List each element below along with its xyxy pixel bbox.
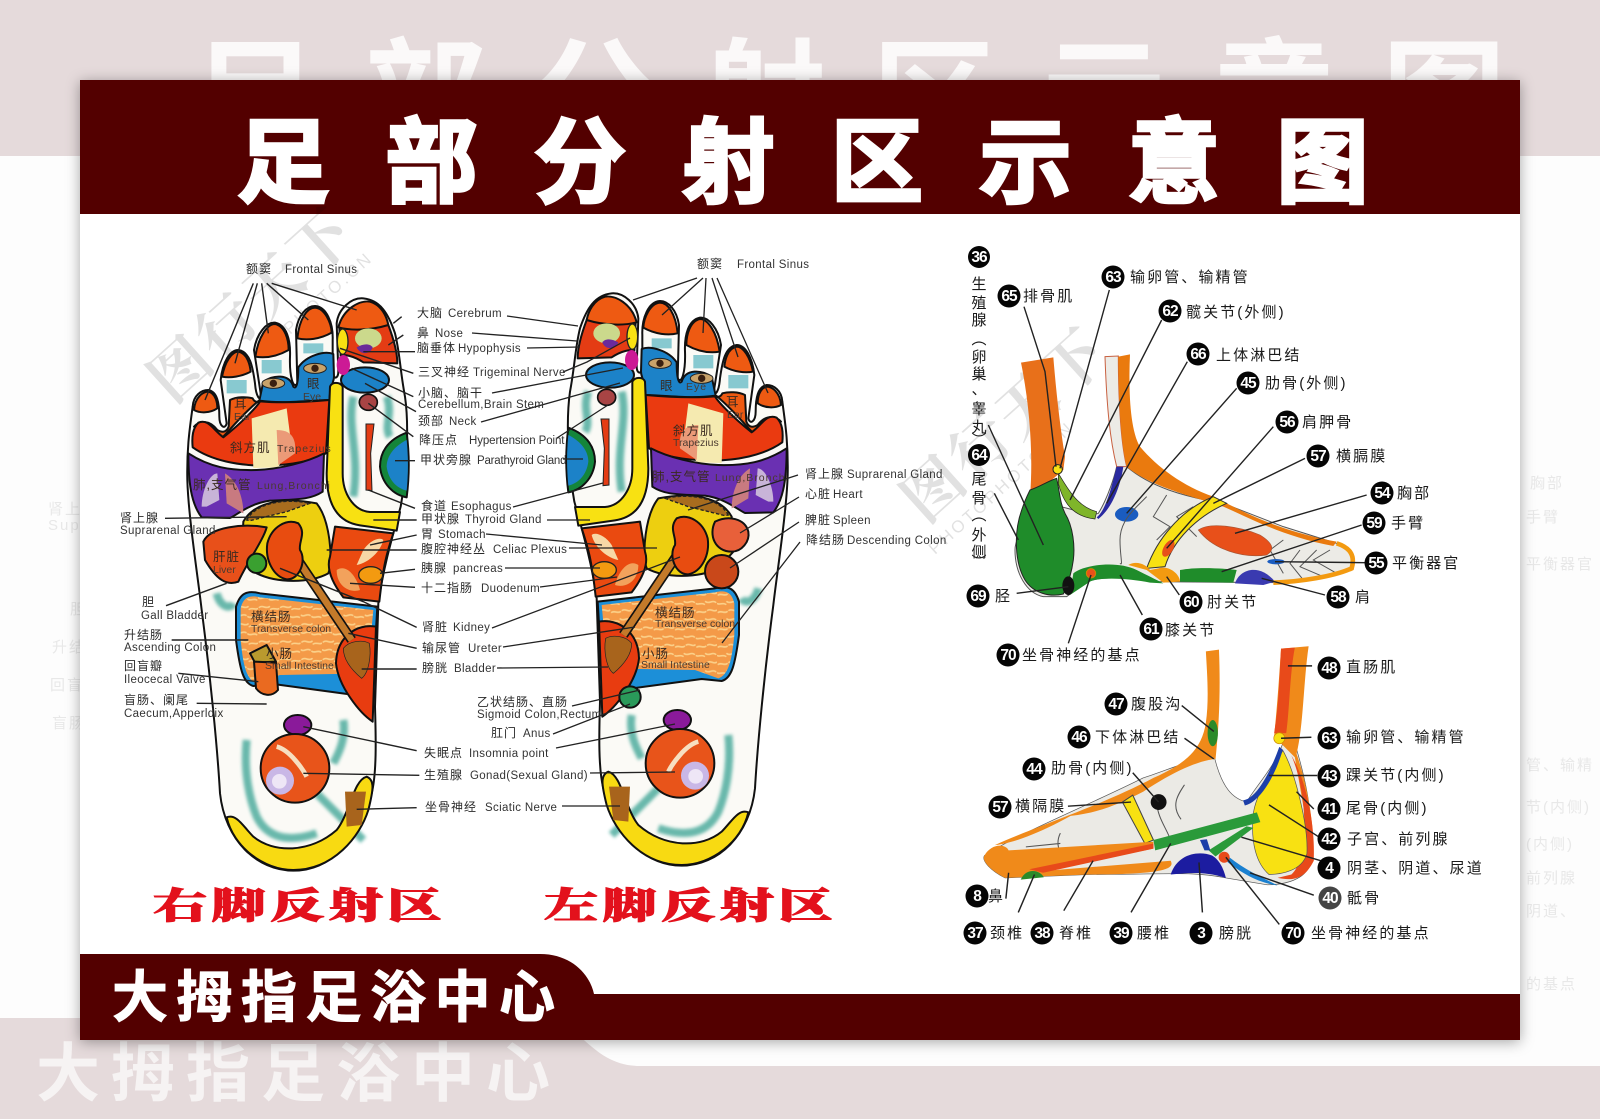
badge numbers: 63	[1321, 730, 1338, 747]
vertical label: coccyx: 侧	[971, 544, 987, 561]
anatomy labels: right foot left column	[120, 511, 224, 720]
badge numbers: 42	[1321, 831, 1337, 848]
anatomy labels: central column: 食道	[421, 499, 447, 513]
side foot labels: 肩	[1355, 589, 1372, 606]
vertical label: coccyx: 尾	[971, 471, 987, 488]
right foot region names: Transverse colon	[251, 623, 331, 635]
anatomy labels: central column: Cerebellum,Brain Stem	[418, 399, 544, 411]
side foot labels: 腹股沟	[1131, 696, 1182, 713]
side foot labels: 膝关节	[1165, 622, 1216, 639]
side foot labels: 膀胱	[1219, 925, 1253, 942]
anatomy labels: central column: Thyroid Gland	[465, 514, 542, 526]
badge numbers: 38	[1034, 925, 1051, 942]
side foot labels: 肘关节	[1207, 594, 1258, 611]
anatomy labels: left foot right column: 脾脏	[805, 513, 831, 527]
ghost side labels: 肾上腺	[48, 501, 99, 518]
watermark: PHOTOPHOTO.CN	[925, 418, 1078, 558]
vertical label: gonad: 殖	[971, 295, 987, 312]
anatomy labels: central column: Cerebrum	[448, 308, 502, 320]
side foot labels: 颈椎	[990, 925, 1024, 942]
side foot labels: 骶骨	[1347, 890, 1381, 907]
numbered badges	[964, 246, 1394, 944]
badge numbers: 4	[1325, 860, 1334, 877]
right foot region names: 小肠	[266, 647, 293, 661]
poster panel	[80, 80, 1520, 1040]
side foot labels: 胫	[995, 588, 1012, 605]
right foot region names: 眼	[307, 377, 321, 391]
badge numbers: 62	[1162, 303, 1178, 320]
right foot: ileocecal valve	[250, 645, 276, 663]
badge numbers	[967, 249, 1391, 942]
side foot labels: 尾骨(内侧)	[1346, 800, 1429, 817]
badge numbers: 56	[1279, 414, 1296, 431]
caption: left foot: 左脚反射区	[544, 878, 837, 929]
left foot map	[472, 278, 800, 866]
badge numbers: 44	[1026, 761, 1043, 778]
badge numbers: 47	[1108, 696, 1124, 713]
anatomy labels: central column: Sciatic Nerve	[485, 802, 557, 814]
badge numbers: 70	[1000, 647, 1016, 664]
anatomy labels: central column: 大脑	[417, 306, 443, 320]
anatomy labels: left foot right column: 降结肠	[806, 533, 845, 547]
anatomy labels: central column: 甲状腺	[421, 512, 460, 526]
anatomy labels: left foot right column: 心脏	[805, 487, 831, 501]
anatomy labels: central column: pancreas	[453, 563, 503, 575]
anatomy labels: central column: 降压点	[419, 433, 458, 447]
badge numbers: 48	[1321, 660, 1338, 677]
left foot region names: Eye	[686, 381, 707, 393]
ghost side labels: 平衡器官	[1526, 556, 1594, 573]
anatomy labels: central column: 颈部	[418, 414, 444, 428]
anatomy labels: central column: 膀胱	[422, 661, 448, 675]
badge numbers: 60	[1183, 594, 1199, 611]
left foot region names: 横结肠	[655, 606, 696, 620]
right foot: liver	[203, 526, 267, 583]
anatomy labels: central column: 输尿管	[422, 641, 461, 655]
footer name: 大拇指足浴中心	[112, 953, 564, 1034]
right foot region names: 肺,支气管	[193, 478, 251, 492]
side foot labels: 腰椎	[1137, 925, 1171, 942]
side foot labels: 横隔膜	[1015, 798, 1066, 815]
badge numbers: 58	[1330, 589, 1347, 606]
left foot region names: 眼	[660, 379, 674, 393]
ghost side labels: 管、输精	[1526, 757, 1594, 774]
vertical label: coccyx: 骨	[971, 490, 987, 507]
left foot region names: Trapezius	[673, 437, 719, 449]
badge numbers: 46	[1071, 729, 1088, 746]
left foot: spleen	[705, 555, 738, 588]
right foot region names: Ear	[234, 411, 251, 423]
vertical label: gonad: 生	[971, 276, 987, 293]
badge numbers: 57	[992, 799, 1008, 816]
right foot region names	[193, 377, 334, 672]
side foot labels: 髋关节(外侧)	[1186, 304, 1286, 321]
anatomy labels: right foot left column: 回盲瓣	[124, 658, 163, 673]
ghost title: 足部分射区示意图	[192, 0, 1552, 178]
anatomy labels: right foot left column: Caecum,Apperldix	[124, 708, 224, 720]
side foot labels: 上体淋巴结	[1216, 347, 1302, 364]
left foot: anus area	[619, 686, 641, 708]
side foot labels: 肩胛骨	[1302, 414, 1353, 431]
ghost footer name: 大拇指足浴中心	[36, 1023, 561, 1115]
watermark	[126, 186, 1124, 558]
anatomy labels: central column: 肾脏	[422, 620, 448, 634]
badge numbers: 55	[1368, 555, 1385, 572]
side foot labels: 下体淋巴结	[1095, 729, 1181, 746]
anatomy labels: central column: Hypertension Point	[469, 435, 565, 447]
anatomy labels: right foot left column: Ascending Colon	[124, 642, 216, 654]
anatomy labels: right foot left column: Suprarenal Gland	[120, 525, 216, 537]
badge numbers: 3	[1197, 925, 1206, 942]
vertical label: gonad: 、	[971, 381, 987, 398]
anatomy labels: central column: Parathyroid Gland	[477, 455, 566, 467]
badge numbers: 37	[967, 925, 983, 942]
left foot region names: Transverse colon	[655, 618, 735, 630]
anatomy labels: central column: Bladder	[454, 663, 496, 675]
badge numbers: 64	[971, 447, 988, 464]
badge numbers: 70	[1285, 925, 1301, 942]
ghost side labels: 回盲	[50, 677, 84, 694]
side foot labels: 直肠肌	[1346, 659, 1397, 676]
right foot region names: Eye	[303, 391, 321, 403]
anatomy labels: left foot right column: 肾上腺	[805, 467, 844, 481]
badge numbers: 63	[1105, 269, 1122, 286]
vertical label: gonad: 丸	[971, 419, 987, 436]
anatomy labels: right foot left column: Ileocecal Valve	[124, 674, 206, 686]
vertical label: gonad: ︶	[971, 432, 987, 449]
vertical label: gonad: 巢	[971, 366, 987, 383]
anatomy labels: central column: Trigeminal Nerve	[473, 367, 566, 379]
right foot region names: Liver	[213, 564, 236, 576]
side foot labels: 横膈膜	[1336, 448, 1387, 465]
caption: right foot: 右脚反射区	[153, 878, 446, 929]
anatomy labels: central column: Esophagus	[451, 501, 512, 513]
anatomy labels: central column: 胰腺	[421, 561, 447, 575]
ghost side labels: 前列腺	[1526, 870, 1577, 887]
watermark: PHOTO.CN	[280, 248, 377, 338]
side foot labels: 坐骨神经的基点	[1022, 647, 1142, 664]
left foot leader lines	[472, 278, 800, 806]
right foot leader lines	[165, 283, 419, 809]
side foot labels: 输卵管、输精管	[1346, 729, 1466, 746]
badge numbers: 66	[1190, 346, 1207, 363]
vertical label: gonad: 卵	[971, 349, 987, 366]
inner side foot diagram	[984, 646, 1321, 924]
vertical label: coccyx	[971, 471, 987, 571]
anatomy labels: central column: Kidney	[453, 622, 490, 634]
title: 足部分射区示意图	[237, 89, 1425, 222]
outer side foot diagram	[988, 290, 1367, 643]
ghost side labels: 节(内侧)	[1526, 799, 1591, 816]
side foot labels: 肋骨(外侧)	[1265, 375, 1348, 392]
badge numbers: 8	[973, 888, 982, 905]
anatomy labels: central column: Stomach	[438, 529, 486, 541]
anatomy labels: right foot left column: 胆	[142, 595, 155, 609]
anatomy labels: left foot right column	[697, 257, 947, 547]
anatomy labels: central column: 脑垂体	[417, 341, 456, 355]
badge numbers: 54	[1374, 485, 1391, 502]
anatomy labels: central column: 三叉神经	[418, 365, 470, 379]
anatomy labels: central column: 鼻	[417, 326, 430, 340]
left foot region names	[641, 379, 789, 671]
anatomy labels: central column: Nose	[435, 328, 463, 340]
anatomy labels: central column: 腹腔神经丛	[421, 542, 486, 556]
anatomy labels: left foot right column: Suprarenal Gland	[847, 469, 943, 481]
badge numbers: 61	[1143, 621, 1160, 638]
side foot labels: 输卵管、输精管	[1130, 269, 1250, 286]
inner foot leader lines	[1006, 666, 1321, 924]
side foot labels: 肋骨(内侧)	[1051, 760, 1134, 777]
right foot region names: 斜方肌	[230, 441, 271, 455]
watermark: 图行天下	[126, 186, 371, 418]
anatomy labels: central column: Sigmoid Colon,Rectum	[477, 709, 602, 721]
anatomy labels: left foot right column: 额窦	[697, 257, 723, 271]
side foot labels: 平衡器官	[1392, 555, 1460, 572]
anatomy labels: central column: Insomnia point	[469, 748, 549, 760]
right foot region names: 横结肠	[251, 610, 292, 624]
left foot region names: Small Intestine	[641, 659, 710, 671]
left foot region names: Lung,Bronchi	[715, 472, 789, 484]
badge numbers: 45	[1240, 375, 1257, 392]
title banner	[80, 80, 1520, 214]
anatomy labels: central column: 肛门	[491, 726, 517, 740]
anatomy labels: central column: Celiac Plexus	[493, 544, 567, 556]
badge numbers: 40	[1322, 890, 1338, 907]
anatomy labels: right foot left column: 盲肠、阑尾	[124, 692, 189, 707]
side foot labels: 鼻	[988, 888, 1005, 905]
side foot labels: 排骨肌	[1023, 288, 1074, 305]
anatomy labels: central column: 失眠点	[424, 746, 463, 760]
badge numbers: 65	[1001, 288, 1018, 305]
ghost side labels: 的基点	[1526, 976, 1577, 993]
anatomy labels: central column: 甲状旁腺	[420, 453, 472, 467]
left foot region names: Ear	[727, 409, 744, 421]
side foot labels: 脊椎	[1059, 925, 1093, 942]
anatomy labels: right foot left column: 肾上腺	[120, 511, 159, 525]
anatomy labels: left foot right column: Spleen	[833, 515, 871, 527]
side foot labels	[988, 269, 1484, 942]
right foot map	[165, 283, 419, 871]
anatomy labels: central column: Gonad(Sexual Gland)	[470, 770, 588, 782]
ghost side labels: 升结肠	[52, 639, 103, 656]
anatomy labels: central column: 额窦	[246, 262, 272, 276]
badge numbers: 39	[1113, 925, 1130, 942]
ghost side labels: 盲肠	[52, 715, 86, 732]
footer banner	[80, 954, 1520, 1040]
anatomy labels: central column: 小脑、脑干	[418, 386, 483, 400]
right foot region names: Small Intestine	[265, 660, 334, 672]
left foot: heart	[712, 518, 749, 552]
side foot labels: 子宫、前列腺	[1347, 831, 1450, 848]
anatomy labels: left foot right column: Descending Colon	[847, 535, 947, 547]
ghost side labels	[48, 475, 1594, 993]
vertical label: gonad: ︵	[971, 331, 987, 348]
left foot region names: 耳	[726, 395, 740, 409]
left foot region names: 小肠	[642, 647, 669, 661]
anatomy labels: central column: Duodenum	[481, 583, 540, 595]
vertical label: gonad	[971, 276, 987, 449]
left foot region names: 肺,支气管	[652, 470, 710, 484]
side foot labels: 阴茎、阴道、尿道	[1347, 860, 1484, 877]
anatomy labels: left foot right column: Frontal Sinus	[737, 259, 809, 271]
anatomy labels: central column: Ureter	[468, 643, 502, 655]
anatomy labels: central column: Anus	[523, 728, 551, 740]
badge numbers: 36	[971, 249, 988, 266]
vertical label: coccyx: 外	[971, 527, 987, 544]
anatomy labels: central column: 生殖腺	[424, 768, 463, 782]
ghost side labels: (内侧)	[1526, 836, 1574, 853]
anatomy labels: right foot left column: Gall Bladder	[141, 610, 208, 622]
right foot: gall bladder	[247, 554, 266, 573]
anatomy labels: central column	[246, 262, 602, 814]
badge numbers: 69	[970, 588, 987, 605]
anatomy labels: central column: 乙状结肠、直肠	[477, 695, 568, 709]
ghost side labels: 阴道、	[1526, 903, 1577, 920]
right foot region names: 肝脏	[213, 550, 240, 564]
anatomy labels: right foot left column: 升结肠	[124, 628, 163, 642]
anatomy labels: left foot right column: Heart	[833, 489, 863, 501]
left foot region names: 斜方肌	[673, 423, 714, 438]
anatomy labels: central column: Hypophysis	[458, 343, 521, 355]
right foot: caecum	[254, 662, 278, 695]
right foot region names: Lung,Bronchi	[257, 480, 331, 492]
vertical label: coccyx: ︶	[971, 554, 987, 571]
vertical label: coccyx: ︵	[971, 507, 987, 524]
side foot labels: 手臂	[1391, 515, 1425, 532]
anatomy labels: central column: 胃	[421, 527, 434, 541]
badge numbers: 43	[1321, 768, 1338, 785]
ghost side labels: 胸部	[1530, 475, 1564, 492]
outer foot leader lines	[988, 290, 1367, 643]
ghost side labels: Supra	[48, 517, 98, 534]
anatomy labels: central column: 坐骨神经	[425, 800, 477, 814]
badge numbers: 57	[1310, 448, 1326, 465]
badge numbers: 41	[1321, 801, 1338, 818]
vertical label: gonad: 睾	[971, 401, 987, 418]
anatomy labels: central column: 十二指肠	[421, 581, 473, 595]
side foot labels: 踝关节(内侧)	[1346, 767, 1446, 784]
watermark: 图行天下	[879, 306, 1124, 538]
badge numbers: 59	[1366, 515, 1383, 532]
side foot labels: 坐骨神经的基点	[1311, 925, 1431, 942]
anatomy labels: central column: Neck	[449, 416, 477, 428]
anatomy labels: central column: Frontal Sinus	[285, 264, 357, 276]
right foot region names: 耳	[234, 397, 248, 411]
side foot labels: 胸部	[1397, 485, 1431, 502]
right foot region names: Trapezius	[277, 443, 332, 455]
ghost side labels: 手臂	[1526, 509, 1560, 526]
ghost side labels: 胆	[70, 601, 87, 618]
vertical label: gonad: 腺	[971, 312, 987, 329]
